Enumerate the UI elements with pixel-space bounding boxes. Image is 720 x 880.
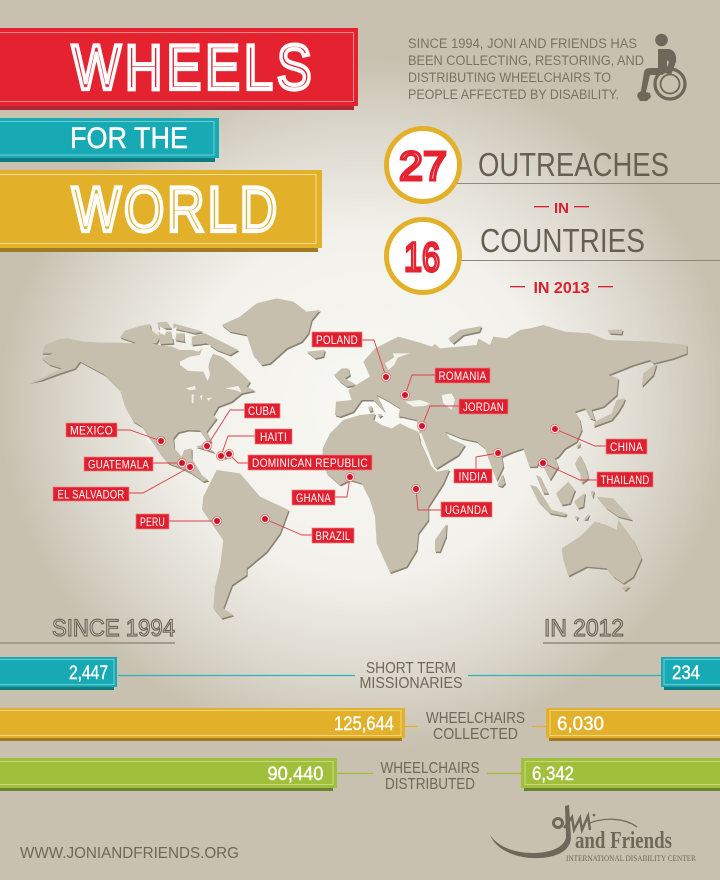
heading: since 1994: SINCE 1994 [52,615,175,642]
asian and pacific islands [530,329,657,591]
label: wheelchairs collected: WHEELCHAIRS [426,710,525,727]
label: haiti [255,429,292,444]
label: peru: PERU [140,517,165,529]
bar: collected since 1994 [0,708,405,741]
label: short term missionaries: MISSIONARIES [360,675,462,692]
label: thailand: THAILAND [600,475,650,487]
bar: distributed since 1994: 90,440 [268,764,324,785]
label: haiti: HAITI [260,432,287,444]
north america [28,322,255,482]
bar: distributed 2012 [521,758,720,791]
label: jordan [459,399,508,414]
heading: in 2013: IN 2013 [533,280,590,297]
label: jordan: JORDAN [463,402,504,414]
leader lines [117,340,606,535]
label: cuba: CUBA [248,406,276,418]
label: china: CHINA [610,442,643,454]
bar: distributed since 1994 [0,758,337,791]
intro paragraph: DISTRIBUTING WHEELCHAIRS TO [408,70,611,85]
label: ghana [292,490,335,505]
bar: missionaries 2012: 234 [672,663,700,684]
label: short term missionaries [360,660,462,692]
africa and eurasia [323,325,687,573]
label: guatemala: GUATEMALA [88,460,149,472]
bar: missionaries since 1994: 2,447 [69,663,108,684]
label: el salvador: EL SALVADOR [58,490,124,502]
circle: 27: 27 [399,143,447,189]
heading: in 2013 [510,280,613,297]
intro paragraph: BEEN COLLECTING, RESTORING, AND [408,53,644,68]
label: dominican republic: DOMINICAN REPUBLIC [252,458,368,470]
bar: missionaries 2012 [661,657,720,690]
map markers [156,372,560,526]
label: wheelchairs distributed [380,760,480,793]
label: short term missionaries: SHORT TERM [366,660,456,677]
label: brazil: BRAZIL [316,531,351,543]
banner: for the: FOR THE [70,122,188,155]
logo: joni and friends: INTERNATIONAL DISABILITY CENTER [566,853,696,863]
heading: countries: COUNTRIES [480,222,645,259]
heading: in [534,200,589,217]
banner: wheels: WHEELS [72,33,311,103]
label: brazil [312,528,354,543]
website url: WWW.JONIANDFRIENDS.ORG [20,845,239,862]
label: wheelchairs distributed: WHEELCHAIRS [380,760,480,777]
logo: joni and friends: and Friends [575,828,672,854]
circle: 16 [386,220,460,292]
label: peru [136,514,169,529]
bar: collected 2012: 6,030 [557,714,604,735]
banner: for the [0,118,219,162]
label: poland: POLAND [316,335,358,347]
heading: in: IN [554,200,569,217]
label: romania: ROMANIA [438,371,487,383]
intro paragraph: PEOPLE AFFECTED BY DISABILITY. [408,87,619,102]
connector lines [118,676,661,774]
label: india: INDIA [458,472,488,484]
bar: collected since 1994: 125,644 [334,714,394,735]
circle: 27 [386,128,460,202]
banner: world: WORLD [72,175,277,245]
label: thailand [597,472,653,487]
map: inland water [142,327,455,467]
label: uganda: UGANDA [445,505,488,517]
bar: distributed 2012: 6,342 [532,764,574,785]
banner: world [0,170,322,252]
label: mexico: MEXICO [70,426,113,438]
label: wheelchairs distributed: DISTRIBUTED [385,776,475,793]
heading: in 2012: IN 2012 [544,615,624,642]
rule lines [450,184,720,260]
icon: wheelchair user [637,34,685,101]
bar: missionaries since 1994 [0,657,117,690]
label: ghana: GHANA [296,493,331,505]
bar: collected 2012 [546,708,720,741]
heading: outreaches: OUTREACHES [478,146,669,183]
label: uganda [441,502,492,517]
logo: joni and friends [490,805,696,863]
intro paragraph: SINCE 1994, JONI AND FRIENDS HAS [408,36,637,51]
label: wheelchairs collected: COLLECTED [433,726,518,743]
circle: 16: 16 [404,234,440,280]
label: wheelchairs collected [426,710,525,743]
world map [28,298,687,618]
banner: wheels [0,28,358,110]
intro paragraph [408,36,644,102]
greenland, iceland, south america [202,298,325,618]
